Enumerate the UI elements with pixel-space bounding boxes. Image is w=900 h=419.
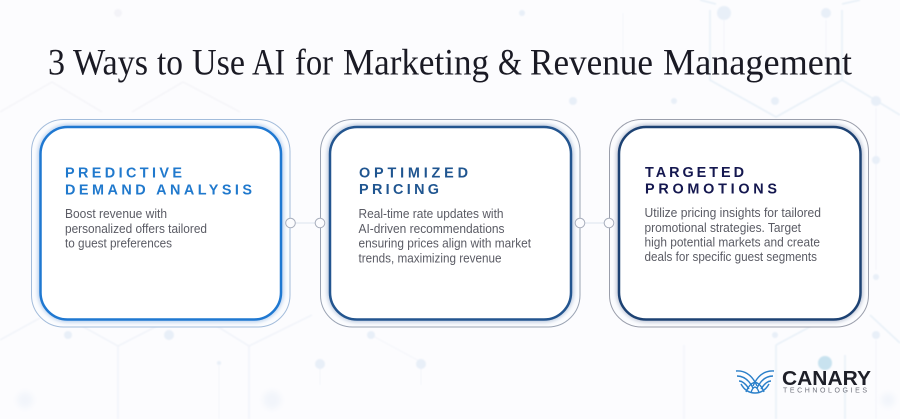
title: to — [157, 42, 183, 82]
heading — [359, 166, 468, 198]
heading: OPTIMIZED — [359, 166, 468, 182]
body text: to guest preferences — [65, 236, 172, 250]
title: 3 — [48, 42, 65, 82]
connector: card 1 to card 2 — [286, 218, 325, 228]
wordmark: CANARY — [782, 368, 872, 390]
panel: targeted promotions — [610, 120, 868, 327]
title: Marketing — [343, 42, 489, 82]
logo: canary technologies — [736, 368, 872, 394]
body text — [65, 207, 207, 250]
heading: PRICING — [359, 182, 439, 198]
heading: PROMOTIONS — [645, 182, 777, 198]
body text: deals for specific guest segments — [644, 250, 817, 264]
title: Management — [663, 42, 852, 82]
body text: Real-time rate updates with — [358, 207, 504, 221]
body text: ensuring prices align with market — [358, 236, 531, 250]
title: for — [295, 42, 333, 82]
title: AI — [252, 42, 285, 82]
body text: personalized offers tailored — [65, 222, 207, 236]
body text — [358, 207, 531, 266]
heading — [65, 166, 252, 198]
body text: trends, maximizing revenue — [358, 252, 502, 266]
heading: PREDICTIVE — [65, 166, 182, 182]
tagline: TECHNOLOGIES — [783, 388, 867, 394]
connector: card 2 to card 3 — [575, 218, 614, 228]
title: & — [498, 42, 522, 82]
title: Use — [192, 42, 245, 82]
body text: Utilize pricing insights for tailored — [644, 206, 821, 220]
heading: TARGETED — [645, 165, 744, 181]
title: Revenue — [530, 42, 653, 82]
body text: high potential markets and create — [644, 236, 820, 250]
icon: canary wings — [736, 371, 774, 393]
body text: Boost revenue with — [65, 207, 167, 221]
heading: DEMAND ANALYSIS — [65, 182, 252, 198]
panel: predictive demand analysis — [32, 120, 290, 327]
body text: promotional strategies. Target — [644, 221, 801, 235]
title: Ways — [73, 42, 148, 82]
heading — [645, 165, 777, 198]
panel: optimized pricing — [320, 120, 580, 327]
body text — [644, 206, 821, 264]
body text: AI-driven recommendations — [358, 222, 504, 236]
